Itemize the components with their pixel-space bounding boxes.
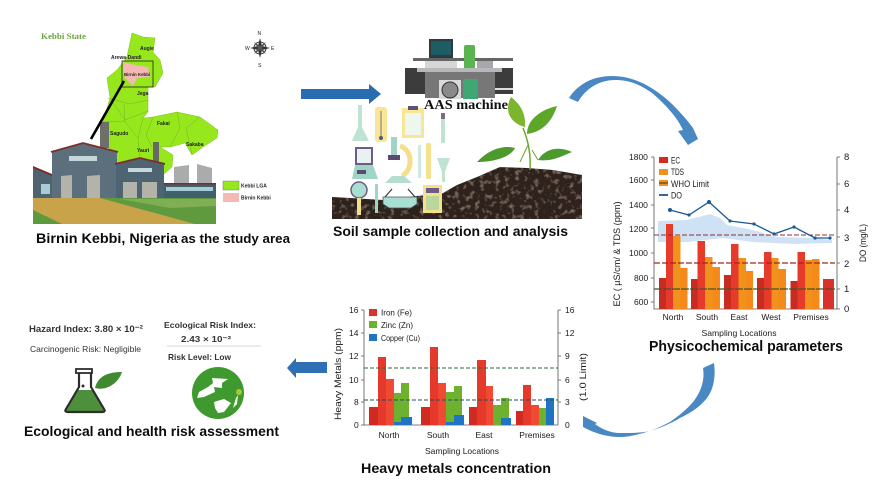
icon: compass rose: S (258, 63, 262, 69)
right axis title: (1.0 Limit) (578, 353, 588, 401)
arrow: locating the study area (91, 81, 124, 139)
legend: DO (671, 190, 682, 200)
right axis ticks (565, 305, 575, 430)
category labels: South (427, 430, 449, 440)
icon: compass rose: E (271, 46, 275, 52)
x axis title: Sampling Locations (425, 446, 499, 456)
caption: study area: Birnin Kebbi, Nigeria (36, 230, 178, 246)
left axis title: EC ( µS/cm/ & TDS (ppm) (612, 201, 622, 306)
right axis ticks: 0 (844, 304, 849, 315)
icon: globe (192, 367, 244, 419)
text: carcinogenic risk: Carcinogenic Risk: Negligible (30, 344, 141, 354)
DO markers (668, 200, 832, 240)
right axis ticks: 8 (844, 152, 849, 163)
left axis title: Heavy Metals (ppm) (333, 328, 343, 420)
category labels (663, 312, 829, 322)
panel: soil sampling (332, 39, 582, 239)
right axis title: DO (mg/L) (858, 224, 868, 262)
legend (659, 156, 709, 200)
legend: Copper (Cu) (381, 333, 420, 343)
map of Kebbi State: Fakai (157, 121, 170, 127)
DO uncertainty band (658, 214, 832, 244)
arrow: heavy metals to risk assessment (287, 358, 327, 378)
legend: Zinc (Zn) (381, 320, 413, 330)
label: AAS machine: AAS machine (424, 97, 508, 112)
left axis ticks: 600 (634, 297, 648, 307)
red bars (369, 347, 539, 425)
arrow: soil analysis to physicochemical results (569, 76, 698, 145)
right axis ticks: 16 (565, 305, 575, 315)
map legend: Birnin Kebbi (241, 196, 271, 202)
panel: study area (33, 31, 291, 246)
legend (369, 308, 420, 343)
right axis ticks: 2 (844, 259, 849, 270)
map of Kebbi State: Birnin Kebbi (124, 72, 150, 77)
category labels: East (730, 312, 748, 322)
chart: heavy metals by location (333, 305, 588, 456)
text: risk level: Risk Level: Low (168, 352, 231, 362)
legend: EC (671, 156, 680, 166)
illustration: soil mound (332, 167, 582, 219)
left axis ticks: 800 (634, 273, 648, 283)
icon: flask with leaf (65, 369, 122, 412)
illustration: seedling (477, 97, 572, 170)
map of Kebbi State: Sakaba (186, 142, 204, 148)
category labels: North (663, 312, 684, 322)
right axis ticks: 0 (565, 420, 570, 430)
DO line (670, 202, 830, 238)
caption: risk assessment: Ecological and health risk assessment (24, 423, 279, 439)
legend: Iron (Fe) (381, 308, 412, 318)
bars (659, 224, 834, 309)
arrow: physicochemical results to heavy metals (583, 363, 715, 437)
legend: WHO Limit (671, 179, 709, 189)
limit lines (364, 368, 558, 400)
left axis ticks: 8 (354, 397, 359, 407)
left axis ticks: 1000 (629, 248, 648, 258)
map of Kebbi State: Augie (140, 46, 154, 52)
category labels: North (379, 430, 400, 440)
right axis ticks: 9 (565, 351, 570, 361)
left axis ticks: 1800 (629, 152, 648, 162)
map of Kebbi State: Yauri (137, 148, 150, 154)
icon: compass rose (245, 31, 275, 69)
map of Kebbi State: Sagudo (110, 131, 128, 137)
x axis title: Sampling Locations (702, 328, 776, 338)
left axis ticks: 10 (349, 375, 359, 385)
right axis ticks: 12 (565, 328, 575, 338)
chart: EC, TDS, WHO limit and DO by location (612, 152, 868, 338)
icon: compass rose: N (258, 31, 262, 37)
right axis ticks (844, 152, 849, 315)
icon: compass rose: W (245, 46, 250, 52)
left axis ticks: 0 (354, 420, 359, 430)
text: ecological risk index: Ecological Risk Index: (164, 320, 256, 330)
category labels: West (761, 312, 781, 322)
caption: heavy metals: Heavy metals concentration (361, 460, 551, 476)
map legend: Kebbi LGA (241, 184, 267, 190)
map heading: Kebbi State (41, 32, 86, 41)
map legend (223, 181, 271, 202)
category labels: South (696, 312, 718, 322)
caption: physicochemical parameters: Physicochemical parameters (649, 338, 843, 355)
category labels (379, 430, 555, 440)
text: hazard index: Hazard Index: 3.80 × 10⁻² (29, 324, 143, 335)
arrow: study area to soil sampling (301, 84, 381, 104)
category labels: Premises (793, 312, 829, 322)
panel: physicochemical parameters (612, 152, 868, 355)
right axis ticks: 1 (844, 284, 849, 295)
left axis ticks: 1400 (629, 200, 648, 210)
map of Kebbi State: Jega (137, 91, 149, 97)
panel: heavy metals concentration (333, 305, 588, 476)
green bars (394, 383, 546, 425)
right axis ticks: 4 (844, 205, 849, 216)
map of Kebbi State: Arewa-Dandi (111, 55, 142, 61)
right axis ticks: 6 (565, 375, 570, 385)
right axis ticks: 3 (565, 397, 570, 407)
left axis ticks: 1200 (629, 224, 648, 234)
text: ecological risk index: 2.43 × 10⁻² (181, 334, 231, 344)
right axis ticks: 3 (844, 233, 849, 244)
panel: ecological and health risk assessment (24, 320, 279, 439)
axes (361, 310, 561, 425)
illustration: AAS machine (405, 39, 513, 99)
left axis ticks: 14 (349, 328, 359, 338)
icons: laboratory tools (351, 105, 450, 215)
category labels: Premises (519, 430, 555, 440)
left axis ticks (349, 305, 359, 430)
axes (651, 157, 840, 309)
blue bars (394, 398, 554, 425)
left axis ticks (629, 152, 648, 307)
limit lines (654, 235, 835, 289)
illustration: factory (33, 122, 216, 224)
right axis ticks: 6 (844, 179, 849, 190)
legend: TDS (671, 167, 684, 177)
left axis ticks: 1600 (629, 175, 648, 185)
left axis ticks: 12 (349, 351, 359, 361)
map of Kebbi State (103, 33, 218, 175)
caption: soil sampling: Soil sample collection and analysis (333, 223, 568, 239)
category labels: East (475, 430, 493, 440)
caption: study area: as the study area (181, 232, 291, 246)
text: ecological risk index (164, 320, 256, 344)
left axis ticks: 16 (349, 305, 359, 315)
